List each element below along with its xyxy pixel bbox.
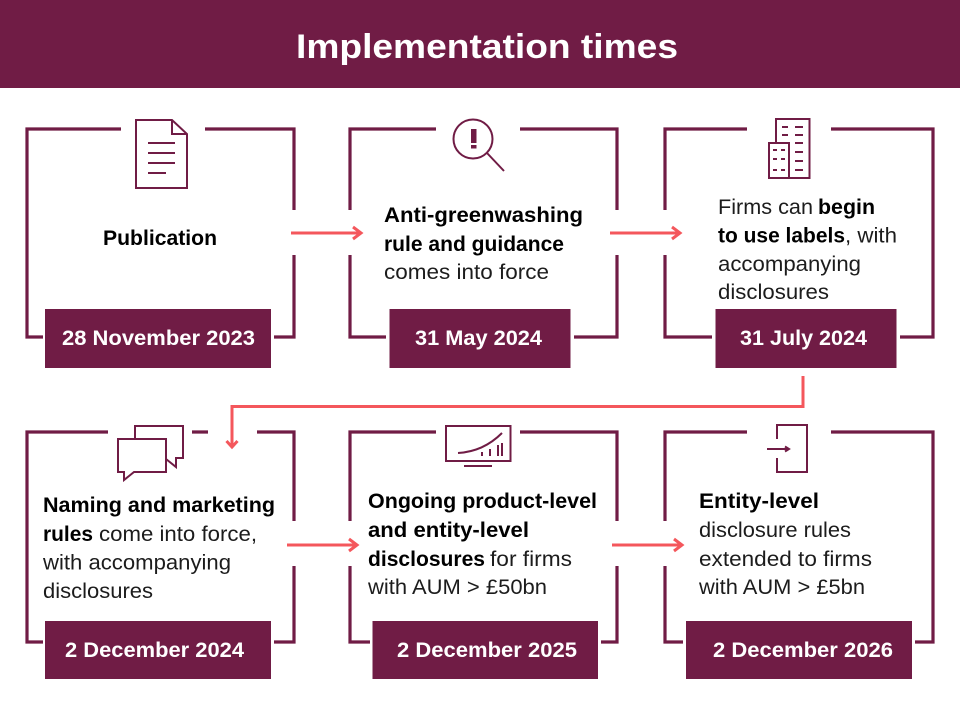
panel text: , with xyxy=(845,224,897,248)
date box: 31 July 2024 xyxy=(740,327,867,350)
panel: entity-level xyxy=(665,425,933,679)
panel text: Firms can xyxy=(718,196,813,219)
panel text: come into force, xyxy=(99,523,257,546)
panel text: begin xyxy=(818,196,875,219)
panel text xyxy=(384,204,583,284)
arrow: publication to anti-greenwashing xyxy=(291,227,361,239)
panel text: rules xyxy=(43,523,93,546)
icon: buildings xyxy=(769,119,810,178)
date box: 2 December 2026 xyxy=(713,639,893,662)
panel text: to use labels xyxy=(718,224,845,248)
date box xyxy=(390,309,570,368)
header banner xyxy=(0,0,960,88)
arrow: anti-greenwashing to labels xyxy=(610,227,680,239)
panel text: Naming and marketing xyxy=(43,494,275,517)
panel: publication xyxy=(27,120,294,368)
panel text: comes into force xyxy=(384,261,549,284)
arrow: labels down to naming rules xyxy=(226,376,803,447)
panel text: Publication xyxy=(103,227,217,250)
panel: labels xyxy=(665,119,933,368)
icon: document xyxy=(136,120,187,188)
panel text: Ongoing product-level xyxy=(368,490,597,513)
panel text xyxy=(42,494,275,603)
date box xyxy=(686,621,912,679)
panel text: for firms xyxy=(490,548,572,571)
date box: 2 December 2024 xyxy=(65,639,244,662)
date box xyxy=(372,621,598,679)
panel text: accompanying xyxy=(718,253,861,276)
panel: ongoing disclosures xyxy=(350,426,617,679)
panel text: Entity-level xyxy=(699,490,819,513)
date box xyxy=(45,621,271,679)
icon: speech bubbles xyxy=(118,426,183,480)
icon: door with arrow xyxy=(767,425,807,472)
panel text xyxy=(367,490,597,599)
icon: monitor with chart xyxy=(446,426,510,466)
panel text: disclosures xyxy=(368,548,485,571)
date box: 28 November 2023 xyxy=(62,327,255,350)
panel text: disclosures xyxy=(43,580,153,603)
panel: anti-greenwashing xyxy=(350,120,617,368)
icon: magnifier xyxy=(454,120,504,171)
title: Implementation times xyxy=(296,28,678,66)
panel text: with AUM > £5bn xyxy=(698,576,865,599)
date box: 31 May 2024 xyxy=(415,327,542,350)
panel text: with AUM > £50bn xyxy=(367,576,547,599)
date box xyxy=(45,309,271,368)
panel text xyxy=(718,196,897,304)
panel text: disclosures xyxy=(718,281,829,304)
date box xyxy=(716,309,896,368)
panel text: disclosure rules xyxy=(699,519,851,542)
arrow: naming rules to ongoing disclosures xyxy=(287,539,357,551)
panel: naming and marketing xyxy=(27,426,294,679)
date box: 2 December 2025 xyxy=(397,639,577,662)
panel text xyxy=(698,490,872,599)
panel text: rule and guidance xyxy=(384,233,564,256)
arrow: ongoing disclosures to entity-level xyxy=(612,539,682,551)
panel text: Anti-greenwashing xyxy=(384,204,583,227)
panel text: and entity-level xyxy=(368,519,529,542)
panel text: extended to firms xyxy=(699,548,872,571)
panel text: with accompanying xyxy=(42,552,231,574)
